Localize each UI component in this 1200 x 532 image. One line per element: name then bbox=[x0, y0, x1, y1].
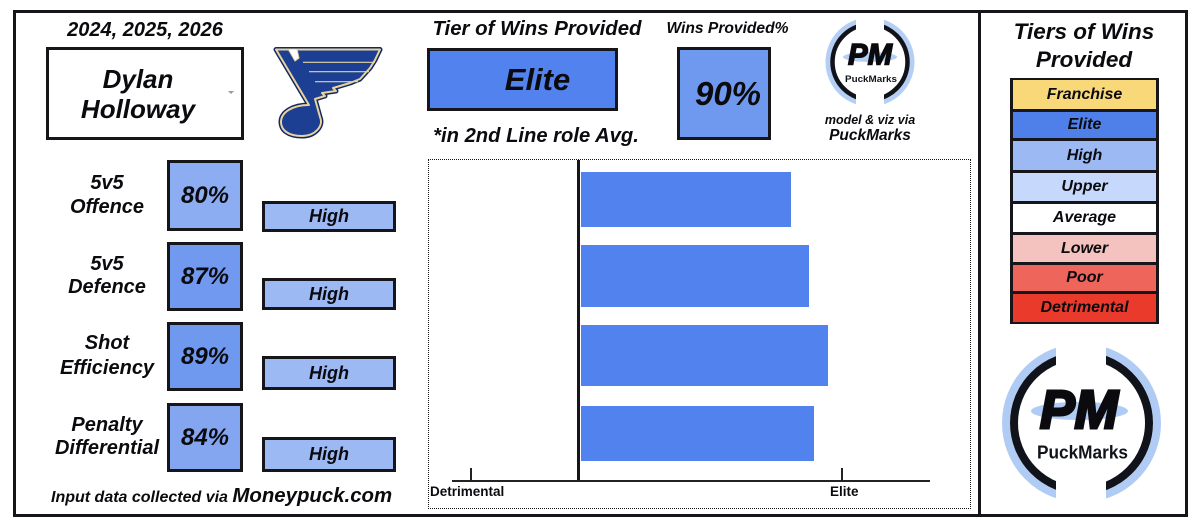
legend heading bbox=[1014, 19, 1154, 72]
icon: large PuckMarks logo bbox=[1002, 348, 1161, 498]
icon: dropdown arrow bbox=[228, 91, 234, 94]
legend tier: Lower: Lower bbox=[1061, 240, 1108, 256]
legend tier: Average: Average bbox=[1053, 209, 1116, 226]
bar: Penalty Differential bbox=[581, 406, 814, 461]
player name selector: Dylan bbox=[103, 64, 173, 94]
label: 5v5 Offence bbox=[70, 172, 144, 218]
metric row: 5v5 Defence bbox=[68, 242, 396, 311]
label: Shot Efficiency: Shot bbox=[85, 332, 129, 354]
icon: large PuckMarks logo: PuckMarks bbox=[1037, 442, 1128, 462]
label: Penalty Differential: Penalty bbox=[71, 414, 143, 436]
legend tier: High: High bbox=[1067, 146, 1102, 164]
bar chart bbox=[428, 159, 971, 509]
tier: High: High bbox=[309, 444, 349, 464]
value: 87%: 87% bbox=[181, 262, 229, 290]
legend tier: Upper bbox=[1010, 171, 1159, 203]
value: 84%: 84% bbox=[181, 424, 229, 450]
panel divider bbox=[978, 11, 981, 516]
chart axis bbox=[452, 480, 930, 482]
tier value box bbox=[427, 48, 618, 111]
bar: 5v5 Defence bbox=[581, 245, 809, 307]
icon: small PuckMarks logo bbox=[826, 20, 914, 104]
label: 5v5 Defence bbox=[68, 252, 146, 298]
value: 84% bbox=[167, 403, 243, 472]
tier heading: Tier of Wins Provided bbox=[432, 18, 642, 40]
legend tier: Average bbox=[1010, 202, 1159, 234]
icon: small PuckMarks logo: PuckMarks bbox=[845, 74, 897, 85]
legend: tiers of wins bbox=[1010, 78, 1159, 324]
wins provided heading: Wins Provided% bbox=[666, 20, 789, 37]
player name selector: Holloway bbox=[81, 94, 195, 124]
chart zero line bbox=[577, 160, 580, 482]
legend tier: Franchise: Franchise bbox=[1047, 86, 1122, 102]
value: 80%: 80% bbox=[181, 182, 229, 208]
tier: High: High bbox=[309, 206, 349, 226]
role note: *in 2nd Line role Avg. bbox=[433, 124, 639, 146]
icon: small PuckMarks logo: PM bbox=[848, 38, 893, 72]
label: 5v5 Defence: 5v5 bbox=[90, 252, 124, 274]
legend tier: Detrimental bbox=[1010, 292, 1159, 324]
value: 87% bbox=[167, 242, 243, 311]
icon: St. Louis Blues note logo bbox=[274, 47, 382, 138]
label: Penalty Differential bbox=[55, 414, 160, 459]
value: 89%: 89% bbox=[181, 342, 229, 370]
icon: large PuckMarks logo: PM bbox=[1040, 380, 1119, 440]
legend tier: Franchise bbox=[1010, 78, 1159, 111]
value: 80% bbox=[167, 160, 243, 231]
bar: 5v5 Offence bbox=[581, 172, 791, 227]
axis tick: Detrimental bbox=[470, 468, 472, 481]
credit: PuckMarks bbox=[829, 127, 911, 144]
legend tier: High bbox=[1010, 139, 1159, 172]
tier: High bbox=[262, 201, 396, 232]
seasons heading: 2024, 2025, 2026 bbox=[67, 18, 223, 40]
legend heading: Provided bbox=[1036, 46, 1132, 72]
axis label: Elite: Elite bbox=[830, 484, 859, 499]
tier: High bbox=[262, 437, 396, 472]
data source note: Input data collected via Moneypuck.com bbox=[51, 485, 392, 507]
label: Shot Efficiency: Efficiency bbox=[60, 356, 154, 378]
axis label: Detrimental: Detrimental bbox=[430, 484, 504, 499]
value: 89% bbox=[167, 322, 243, 391]
wins provided value bbox=[677, 47, 771, 140]
credit: model & viz via bbox=[825, 113, 915, 127]
label: 5v5 Defence: Defence bbox=[68, 276, 146, 298]
legend tier: Poor bbox=[1010, 263, 1159, 293]
label: 5v5 Offence: Offence bbox=[70, 196, 144, 218]
legend heading: Tiers of Wins bbox=[1014, 19, 1154, 44]
legend tier: Poor: Poor bbox=[1066, 269, 1103, 286]
metric row: Shot Efficiency bbox=[60, 322, 396, 391]
legend tier: Lower bbox=[1010, 233, 1159, 264]
legend tier: Detrimental: Detrimental bbox=[1040, 299, 1129, 316]
legend tier: Elite: Elite bbox=[1068, 116, 1101, 133]
player name selector bbox=[46, 47, 244, 140]
bar: Shot Efficiency bbox=[581, 325, 828, 386]
credit bbox=[825, 113, 915, 144]
tier: High bbox=[262, 278, 396, 310]
tier: High: High bbox=[309, 362, 349, 382]
label: Shot Efficiency bbox=[60, 332, 155, 378]
metric row: Penalty Differential bbox=[55, 403, 396, 472]
wins provided value: 90% bbox=[695, 74, 761, 112]
legend tier: Elite bbox=[1010, 110, 1159, 140]
tier value box: Elite bbox=[505, 62, 570, 96]
label: 5v5 Offence: 5v5 bbox=[90, 172, 124, 194]
metric row: 5v5 Offence bbox=[70, 160, 396, 232]
tier: High bbox=[262, 356, 396, 390]
axis tick: Elite bbox=[841, 468, 843, 481]
tier: High: High bbox=[309, 284, 349, 304]
label: Penalty Differential: Differential bbox=[55, 437, 159, 459]
legend tier: Upper: Upper bbox=[1061, 178, 1108, 195]
